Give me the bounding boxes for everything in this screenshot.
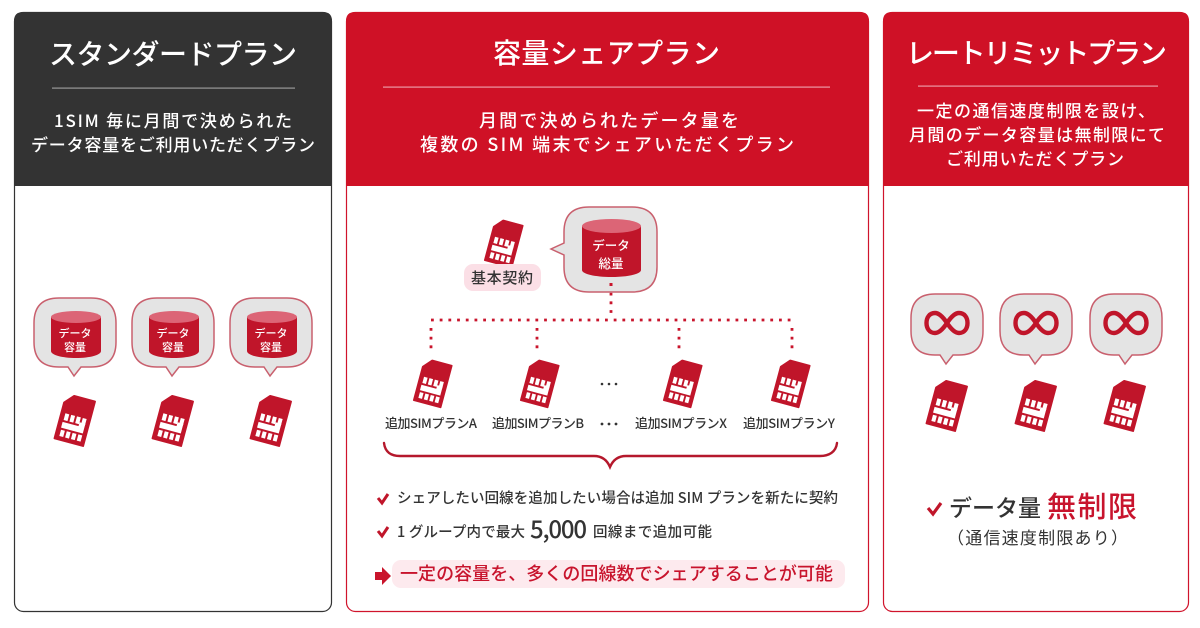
capacity share header [346, 12, 869, 186]
icon: SIM card 1 [927, 379, 967, 431]
dotted connector tree [431, 284, 792, 352]
label: plan A: 追加SIMプランA [385, 413, 478, 432]
heading: standard plan: スタンダードプラン [49, 33, 297, 73]
panel: rate limit plan [883, 12, 1189, 612]
icon: SIM card 3 [1105, 379, 1145, 431]
unlimited bubble 3 [1090, 294, 1162, 364]
heading: rate limit plan: レートリミットプラン [906, 32, 1167, 72]
bullet: maximum lines: 回線まで追加可能 [593, 521, 712, 542]
panel: capacity share plan [346, 12, 869, 612]
icon: infinity [1016, 313, 1056, 333]
icon: SIM card 2 [1016, 379, 1056, 431]
total data bubble: データ [592, 235, 630, 254]
bullet: maximum lines [378, 510, 712, 545]
data capacity bubble 1 [34, 298, 116, 376]
standard plan description [31, 107, 315, 156]
icon: SIM plan X [664, 359, 702, 407]
base contract label [464, 264, 541, 291]
rate limit description: 月間のデータ容量は無制限にて [909, 121, 1165, 146]
data capacity bubble 2: データ [156, 325, 190, 341]
bullet: maximum lines: 1 グループ内で最大 [397, 521, 525, 542]
data capacity bubble 2 [132, 298, 214, 376]
unlimited data statement [928, 484, 1137, 526]
capacity share description: 月間で決められたデータ量を [479, 107, 739, 133]
unlimited bubble 1 [911, 294, 983, 364]
panel: standard plan [14, 12, 332, 612]
bullet: maximum lines: 5,000 [530, 510, 587, 545]
rate limit description: ご利用いただくプラン [946, 145, 1124, 170]
brace [384, 443, 837, 467]
icon: check mark [928, 503, 941, 514]
label: plan B: 追加SIMプランB [492, 413, 584, 432]
speed limit note: （通信速度制限あり） [947, 524, 1128, 549]
icon: SIM card 1 [55, 394, 95, 446]
callout: share capacity: 一定の容量を、多くの回線数でシェアすることが可能 [400, 560, 833, 586]
total data bubble: 総量 [598, 253, 624, 272]
icon: SIM card 3 [251, 394, 291, 446]
data capacity bubble 3: 容量 [260, 339, 282, 355]
standard plan header [14, 12, 332, 186]
standard plan description: 1SIM 毎に月間で決められた [54, 107, 292, 132]
data capacity bubble 1: データ [58, 325, 92, 341]
icon: SIM plan B [521, 359, 559, 407]
data capacity bubble 2: 容量 [162, 339, 184, 355]
unlimited bubble 2 [1000, 294, 1072, 364]
rate limit description: 一定の通信速度制限を設け、 [917, 97, 1155, 122]
base contract label: 基本契約 [471, 267, 533, 288]
unlimited data statement: 無制限 [1047, 484, 1137, 526]
data capacity bubble 1: 容量 [64, 339, 86, 355]
icon: arrow [375, 567, 391, 585]
capacity share description [420, 107, 794, 157]
label: plan X: 追加SIMプランX [635, 413, 727, 432]
icon: base contract SIM [485, 219, 523, 267]
icon: SIM plan Y [772, 359, 810, 407]
icon: SIM plan A [414, 359, 452, 407]
icon: check mark [378, 494, 388, 503]
label: plan Y: 追加SIMプランY [743, 413, 836, 432]
bullet: add SIM plan: シェアしたい回線を追加したい場合は追加 SIM プランを新たに契約 [397, 487, 838, 508]
rate limit description [909, 97, 1165, 170]
total data bubble [551, 207, 657, 292]
ellipsis between SIM icons [601, 383, 617, 385]
icon: infinity [1106, 313, 1146, 333]
icon: infinity [926, 313, 968, 333]
standard plan description: データ容量をご利用いただくプラン [31, 131, 315, 156]
capacity share description: 複数の SIM 端末でシェアいただくプラン [420, 131, 794, 157]
icon: SIM card 2 [153, 394, 193, 446]
ellipsis between labels [601, 423, 617, 425]
icon: check mark [378, 527, 388, 536]
rate limit header [883, 12, 1189, 186]
data capacity bubble 3: データ [254, 325, 288, 341]
unlimited data statement: データ量 [949, 489, 1041, 523]
data capacity bubble 3 [230, 298, 312, 376]
heading: capacity share plan: 容量シェアプラン [493, 32, 720, 72]
